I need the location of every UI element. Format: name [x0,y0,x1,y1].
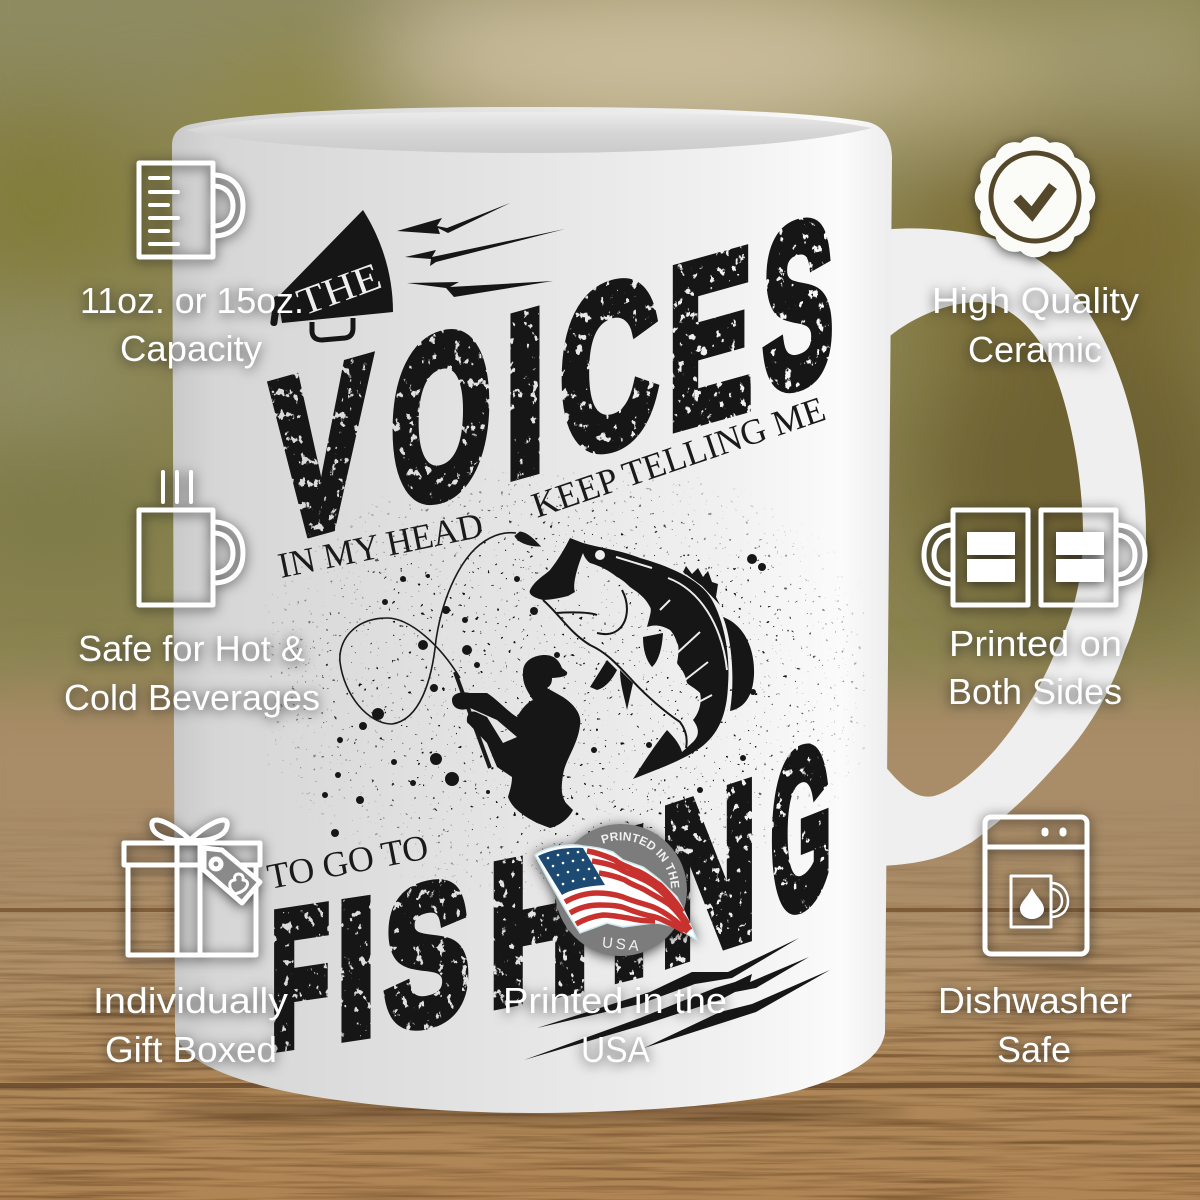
feature: both sides [924,510,1145,712]
heading: FISHING: F [271,867,329,1088]
heading: VOICES [272,168,833,590]
subheading: in my head: IN MY HEAD [275,505,486,586]
label: dishwasher safe [938,980,1132,1070]
label: high quality: Ceramic [968,329,1102,370]
heading: FISHING: I [337,860,375,1078]
icon: measuring mug [139,163,243,257]
feature: hot and cold [64,472,320,718]
claw scratches [524,938,830,1060]
printed in the USA badge [528,816,704,968]
large ink splatter dots [322,554,766,837]
feature: dishwasher safe [938,817,1132,1070]
american flag [535,845,697,940]
mug body [172,107,892,1113]
subheading: keep telling me: KEEP TELLING ME [527,389,830,526]
heading: VOICES: I [505,261,545,525]
text: G [771,695,831,964]
label: hot and cold: Safe for Hot & [78,628,305,669]
icon: two mugs [924,510,1145,605]
feature: gift boxed [93,820,288,1070]
heading: FISHING [271,695,831,1088]
fish belly and gill lines [543,590,687,748]
label: both sides: Both Sides [948,671,1122,712]
heading: FISHING: I [610,785,648,1023]
fish markings [616,557,727,705]
label: dishwasher safe: Safe [997,1029,1071,1070]
subheading: to go to: TO GO TO [264,826,432,897]
sound lightning marks [397,203,565,297]
icon: quality badge [975,137,1095,257]
wooden table [0,690,1200,1200]
feature: capacity [80,163,304,369]
badge USA text: USA [601,934,643,955]
fisherman silhouette [452,655,580,828]
mug handle [880,228,1146,866]
fish tail fin [723,617,754,711]
splatter texture [265,470,865,890]
mug shadow on table [150,1102,910,1122]
label: high quality [932,280,1139,370]
heading: FISHING: N [660,733,757,1012]
label: capacity [80,280,304,369]
label: high quality: High Quality [932,280,1139,321]
fish side fins [590,633,663,710]
label: printed in the USA [503,980,727,1070]
heading: FISHING: H [489,807,589,1048]
mug opening [186,112,872,153]
megaphone with THE [270,210,393,340]
fish eye [594,549,606,561]
label: hot and cold: Cold Beverages [64,677,320,718]
label: capacity: Capacity [120,328,262,369]
icon: steaming mug [139,472,243,605]
heading: VOICES: V [272,310,370,590]
label: both sides: Printed on [949,623,1122,664]
heading: VOICES: C [560,226,658,507]
heading: VOICES: E [668,200,752,477]
heading: VOICES: O [391,276,491,557]
text: S [763,168,833,441]
label: gift boxed [93,980,288,1070]
icon: dishwasher [985,817,1087,954]
label: printed in the USA: USA [581,1029,650,1070]
label: both sides [948,623,1122,712]
icon: gift box with tag [124,820,260,955]
label: hot and cold [64,628,320,718]
label: gift boxed: Gift Boxed [105,1029,277,1070]
feature: high quality [932,137,1139,370]
label: dishwasher safe: Dishwasher [938,980,1132,1021]
megaphone with THE: THE [291,255,387,324]
fish dorsal fin [683,566,720,605]
label: gift boxed: Individually [93,980,288,1021]
bass fish [530,538,754,779]
badge arc text: PRINTED IN THE [601,832,680,888]
label: capacity: 11oz. or 15oz. [80,280,304,321]
heading: FISHING: S [385,839,469,1072]
fishing rod and line [340,532,540,768]
label: printed in the USA: Printed in the [503,980,727,1021]
